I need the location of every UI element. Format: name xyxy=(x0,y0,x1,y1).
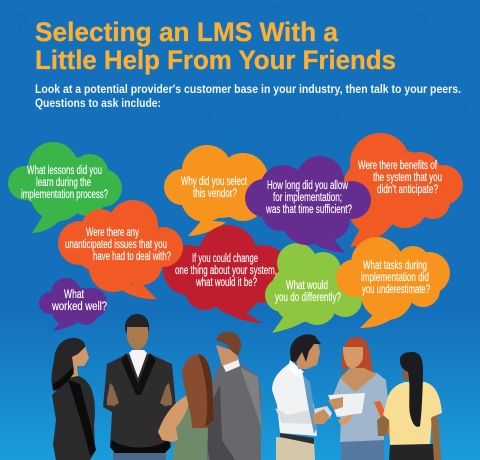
text: ? xyxy=(330,109,341,129)
text: ? xyxy=(440,60,457,91)
speech bubble: lessons xyxy=(8,142,122,233)
speech bubble: how long: for implementation; xyxy=(273,192,342,204)
text: ? xyxy=(410,5,432,46)
speech bubble: issues: Were there any xyxy=(86,227,139,239)
person: woman in black suit xyxy=(51,338,96,460)
text: ? xyxy=(60,111,72,133)
speech bubble: how long: How long did you allow xyxy=(267,180,348,192)
speech bubble: issues: unanticipated issues that you xyxy=(65,239,167,251)
person: man in black jacket xyxy=(103,314,176,460)
speech bubble: why this vendor: this vendor? xyxy=(193,188,237,200)
text: ? xyxy=(130,1,145,28)
person: woman with brown hair xyxy=(158,354,214,460)
person: woman with red hair and papers xyxy=(328,337,388,460)
text: ? xyxy=(10,6,30,42)
speech bubble: lessons: learn during the xyxy=(36,177,91,189)
speech bubble: differently xyxy=(265,243,362,333)
speech bubble: issues: have had to deal with? xyxy=(93,251,171,263)
speech bubble: change one thing xyxy=(163,225,288,323)
speech bubble: worked well: What xyxy=(64,289,85,301)
speech bubble: worked well: worked well? xyxy=(51,301,107,313)
speech bubble: benefits xyxy=(343,133,463,247)
intro text: Questions to ask include: xyxy=(35,96,161,110)
speech bubble: change one thing: If you could change xyxy=(192,253,258,265)
speech bubble: benefits: didn't anticipate? xyxy=(377,184,438,196)
speech bubble: lessons: What lessons did you xyxy=(27,165,102,177)
speech bubble: change one thing: what would it be? xyxy=(195,277,257,289)
person: man in white shirt xyxy=(272,334,332,460)
speech bubble: tasks: you underestimate? xyxy=(362,284,430,296)
text: ? xyxy=(270,0,283,25)
speech bubble: how long xyxy=(245,156,371,253)
title: Selecting an LMS With a xyxy=(35,17,339,47)
text: ? xyxy=(400,55,412,77)
speech bubble: how long: was that time sufficient? xyxy=(265,204,352,216)
speech bubble: lessons: implementation process? xyxy=(21,189,108,201)
speech bubble: change one thing: one thing about your system, xyxy=(175,265,277,277)
text: ? xyxy=(8,76,24,106)
text: ? xyxy=(340,4,356,34)
speech bubble: differently: What would xyxy=(286,280,328,292)
text: ? xyxy=(455,100,468,125)
speech bubble: worked well xyxy=(39,278,107,331)
title: Little Help From Your Friends xyxy=(35,45,396,75)
person: woman in yellow top with orange book xyxy=(374,352,442,460)
speech bubble: tasks: implementation did xyxy=(361,272,429,284)
speech bubble: differently: you do differently? xyxy=(275,292,341,304)
person: man in grey suit xyxy=(203,332,262,460)
speech bubble: tasks: What tasks during xyxy=(363,260,427,272)
intro text xyxy=(35,82,461,110)
speech bubble: why this vendor xyxy=(164,145,268,236)
speech bubble: benefits: the system that you xyxy=(373,172,442,184)
speech bubble: why this vendor: Why did you select xyxy=(181,176,248,188)
speech bubble: benefits: Were there benefits of xyxy=(358,160,438,172)
title xyxy=(35,17,396,75)
speech bubble: tasks xyxy=(336,237,450,328)
text: ? xyxy=(200,109,212,131)
speech bubble: issues xyxy=(58,200,183,299)
